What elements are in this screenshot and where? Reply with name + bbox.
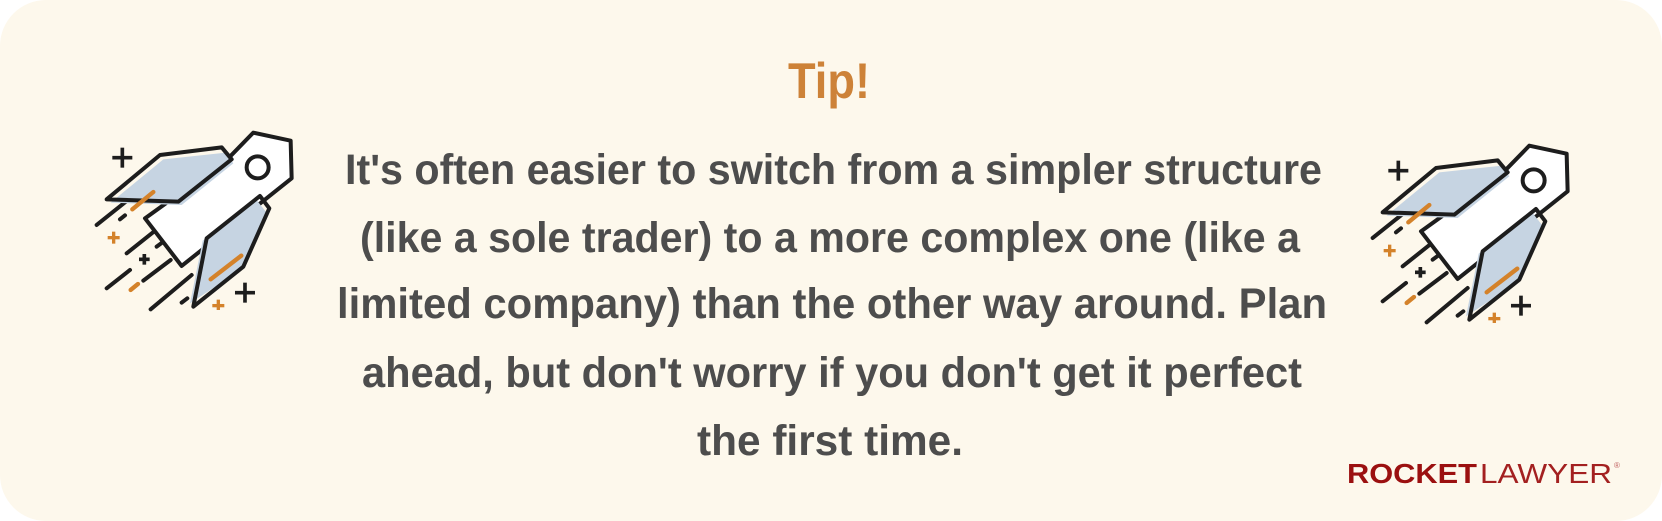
body text: It's often easier to switch from a simpler structure: [345, 146, 1322, 194]
icon: right rocket: [1373, 146, 1568, 323]
body text: (like a sole trader) to a more complex one (like a: [360, 214, 1301, 262]
logo: Rocket Lawyer: LAWYER: [1480, 458, 1612, 489]
body text: [337, 146, 1327, 465]
logo: Rocket Lawyer: ROCKET: [1347, 458, 1477, 489]
logo: Rocket Lawyer: [1347, 458, 1620, 489]
icon: left rocket: [97, 133, 292, 310]
body text: the first time.: [697, 417, 963, 465]
title: Tip!: [788, 53, 870, 109]
logo: Rocket Lawyer: ®: [1614, 461, 1620, 470]
body text: limited company) than the other way around. Plan: [337, 280, 1327, 328]
body text: ahead, but don't worry if you don't get it perfect: [362, 349, 1302, 397]
